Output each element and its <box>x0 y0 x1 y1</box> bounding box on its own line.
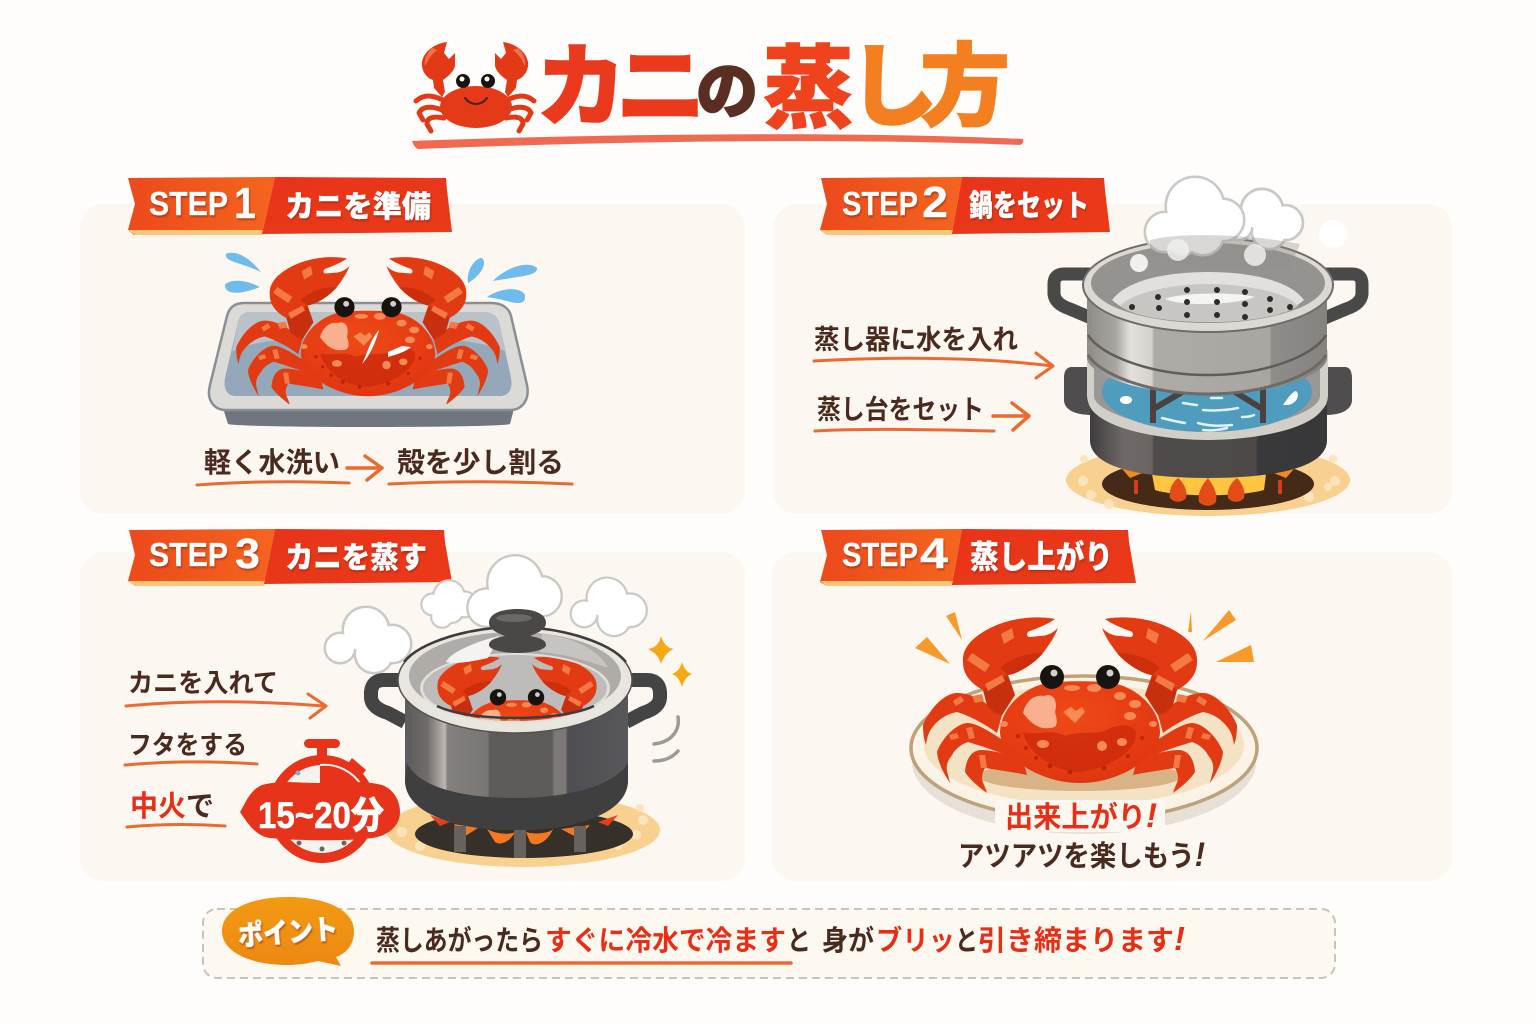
point text: 身が <box>822 924 874 956</box>
text: add crab: カニを入れて <box>128 668 278 698</box>
timer badge <box>240 782 400 840</box>
icon: steam clouds <box>1130 178 1347 272</box>
underline heat <box>127 825 225 827</box>
point bubble <box>222 897 354 966</box>
rim and inner <box>1083 238 1333 332</box>
step 3 ribbon <box>128 529 452 586</box>
step 2 ribbon: 2 <box>922 178 948 227</box>
lower pot handles <box>1064 367 1352 415</box>
point text: 蒸しあがったら <box>376 924 543 956</box>
step 4 ribbon <box>820 529 1136 586</box>
crack marks on shell <box>362 330 411 364</box>
pot handles <box>371 680 405 722</box>
icon: steam clouds <box>326 556 646 672</box>
lid glass highlights <box>446 636 500 663</box>
title text: の <box>696 58 758 127</box>
title text: ニ <box>616 38 706 138</box>
step 2 ribbon <box>820 177 1110 235</box>
step 2 ribbon: 鍋をセット <box>969 190 1089 223</box>
icon: burner <box>386 793 660 867</box>
icon: burst rays <box>915 610 1254 664</box>
callout: point <box>203 897 1335 978</box>
icon: sparkles <box>648 636 692 687</box>
panel: step 4 <box>772 529 1452 881</box>
arrow <box>347 456 382 480</box>
arrow: add crab <box>126 694 326 718</box>
water basin <box>1087 350 1328 440</box>
text backing <box>995 800 1165 832</box>
point text <box>376 920 1185 957</box>
title crab icon <box>416 42 534 131</box>
point underline <box>372 961 791 965</box>
text: cover: フタをする <box>128 730 247 760</box>
underline crack <box>389 482 572 484</box>
icon: lidded pot <box>371 609 660 830</box>
text: wash: 軽く水洗い <box>204 447 340 478</box>
point text: ブリッ <box>876 924 955 956</box>
upper steamer body <box>1087 285 1327 394</box>
icon: timer <box>240 739 400 863</box>
step 1 ribbon: STEP <box>149 185 228 222</box>
lower pot body <box>1090 405 1327 478</box>
title underline <box>412 134 1023 149</box>
text: finished: 出来上がり! <box>1005 797 1157 835</box>
icon: water drops <box>225 253 537 303</box>
lid knob <box>489 609 546 653</box>
panel: step 1 <box>80 177 745 514</box>
panel: step 3 <box>80 529 745 881</box>
icon: crab on tray <box>236 257 500 405</box>
point text: 引き締まります! <box>978 920 1185 957</box>
text: set rack: 蒸し台をセット <box>817 395 984 425</box>
step 3 ribbon: 3 <box>235 530 260 578</box>
text: add water: 蒸し器に水を入れ <box>814 325 1018 355</box>
title <box>412 38 1023 149</box>
point text: すぐに冷水で冷ます <box>545 925 786 956</box>
pot rim <box>398 627 632 733</box>
text: crack shell: 殻を少し割る <box>397 447 564 478</box>
title text: 方 <box>920 38 1010 138</box>
step 1 ribbon: 1 <box>234 179 256 228</box>
step 4 ribbon: 蒸し上がり <box>970 539 1113 575</box>
step 2 ribbon: STEP <box>842 185 918 222</box>
pot body <box>405 690 628 830</box>
step 4 ribbon: 4 <box>920 530 948 578</box>
icon: plate <box>911 676 1257 834</box>
point bubble: ポイント <box>237 914 339 951</box>
arrow: add water <box>814 353 1053 378</box>
upper handles <box>1054 274 1096 320</box>
title text: カ <box>536 38 626 138</box>
point text: と <box>787 925 811 956</box>
step 1 ribbon: カニを準備 <box>285 191 431 224</box>
title text: し <box>848 38 938 138</box>
steamer plate <box>1112 272 1304 322</box>
underline cover <box>125 762 257 765</box>
step 1 ribbon <box>128 177 452 235</box>
icon: timer: 15~20分 <box>258 795 384 836</box>
text: enjoy hot: アツアツを楽しもう! <box>958 836 1205 874</box>
underline rack <box>815 429 994 431</box>
text: medium heat: 中火で <box>130 790 214 823</box>
title text: 蒸 <box>763 40 853 140</box>
icon: finished crab <box>923 617 1237 793</box>
rack legs <box>1153 385 1263 423</box>
icon: burner mat <box>1066 444 1350 516</box>
icon: steamer pot <box>1054 238 1362 478</box>
point text: と <box>955 925 978 956</box>
underline wash <box>197 482 349 485</box>
icon: vibration lines <box>654 717 678 761</box>
pot lower band <box>405 763 628 830</box>
step 3 ribbon: STEP <box>149 536 228 573</box>
icon: tray <box>209 303 528 427</box>
panel: step 2 <box>773 177 1452 516</box>
step 3 ribbon: カニを蒸す <box>285 542 427 575</box>
crab in pot <box>437 656 597 721</box>
step 4 ribbon: STEP <box>842 536 918 573</box>
arrow: set rack <box>993 403 1029 430</box>
